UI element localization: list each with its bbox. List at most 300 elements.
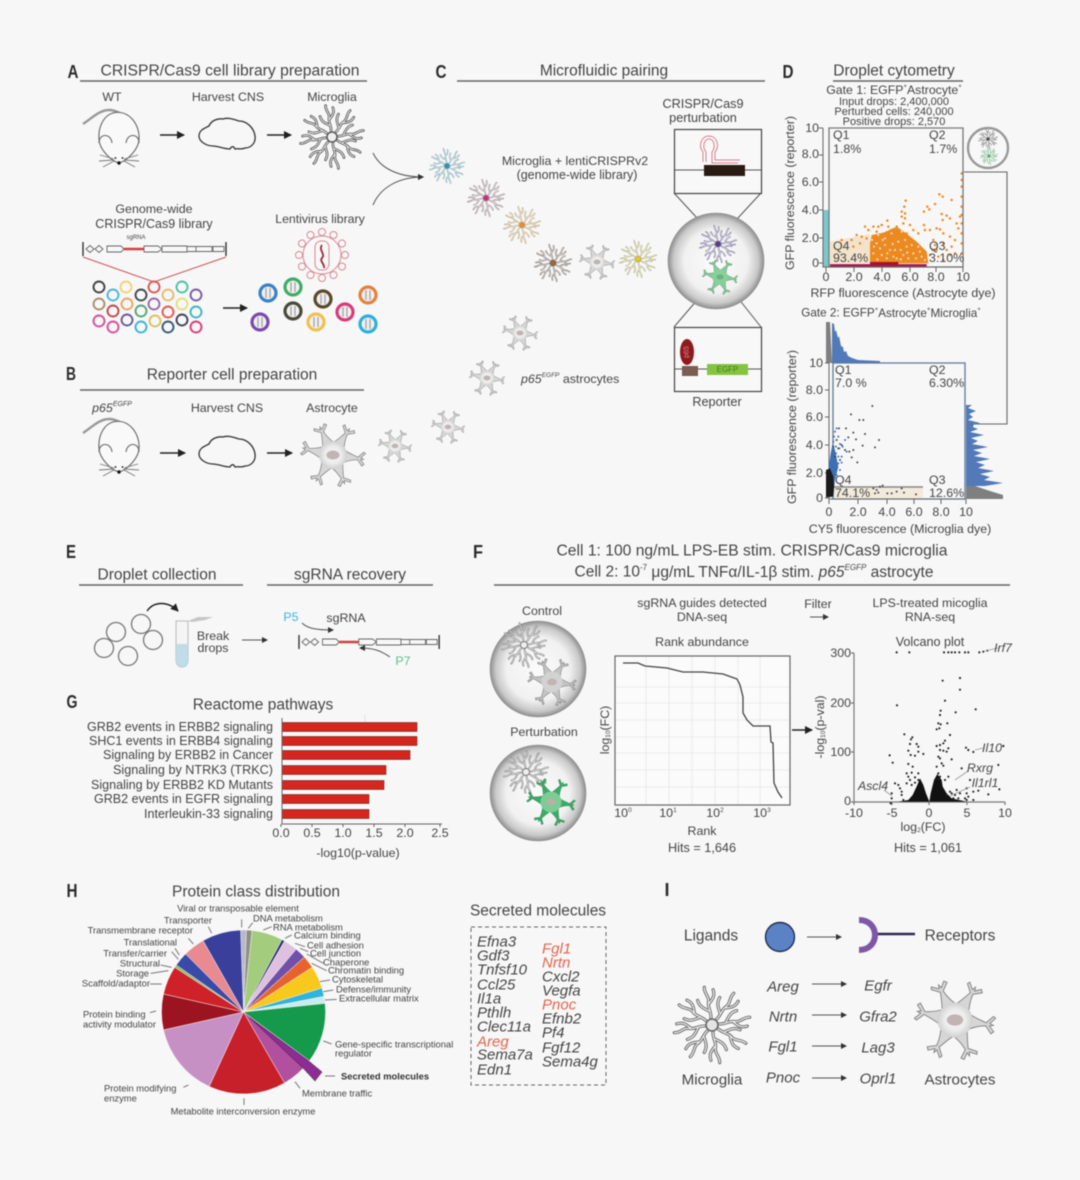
x axis title: (FC) [921, 820, 945, 834]
gene list column 1 [476, 934, 533, 1078]
x axis ticks [272, 826, 449, 840]
heading B: Reporter cell preparation [147, 366, 317, 384]
pathway labels: Signaling by ERBB2 KD Mutants [91, 778, 273, 792]
quadrant labels gate 2: Q3 [929, 473, 946, 487]
label drops: drops [198, 641, 228, 655]
x axis ticks gate 2: 6.0 [905, 505, 923, 519]
panel letter F: F [473, 542, 483, 562]
label Ligands: Ligands [684, 928, 738, 944]
label Perturbation: Perturbation [510, 725, 578, 739]
panel letter H: H [66, 881, 78, 901]
x axis ticks gate 1: 2.0 [845, 270, 863, 284]
icon: microglia [300, 105, 364, 169]
x axis ticks: 10 [753, 806, 767, 820]
pie labels: Structural [120, 958, 160, 968]
connector from gate 1 to gate 2 [964, 172, 1007, 424]
label gate 2: Microglia [930, 306, 978, 320]
pie labels: Translational [124, 936, 177, 948]
ligand gene names: Nrtn [769, 1008, 797, 1026]
heading C: Microfluidic pairing [540, 62, 668, 80]
heading secreted molecules: Secreted molecules [470, 902, 606, 920]
label sgRNA guides detected: sgRNA guides detected [637, 596, 767, 610]
pathway labels: Signaling by NTRK3 (TRKC) [113, 763, 273, 777]
x axis ticks: 10 [998, 806, 1012, 820]
vector map [83, 242, 226, 256]
pie labels: Membrane traffic [302, 1088, 372, 1098]
icon: astrocyte [300, 423, 366, 488]
gene list column 1: Ccl25 [477, 976, 516, 994]
pie labels: Transporter [164, 914, 212, 926]
receptor gene names: Oprl1 [860, 1070, 896, 1088]
chart title: Rank abundance [655, 635, 749, 649]
panel A: CRISPR/Cas9 cell library preparation [68, 62, 423, 332]
label Harvest CNS: Harvest CNS [191, 401, 263, 415]
receptor gene names: Egfr [864, 978, 893, 994]
gene list column 2: Fgf12 [542, 1040, 581, 1056]
y axis ticks gate 1: 8.0 [802, 147, 819, 161]
x axis ticks: -5 [886, 806, 898, 820]
gate 1 statistics [834, 96, 954, 128]
x axis ticks: 5 [964, 806, 971, 820]
gene list column 1: Pthlh [477, 1004, 511, 1022]
gene list column 2 [542, 940, 599, 1070]
heading line 2: EGFP [844, 562, 867, 572]
pie labels: Cell junction [310, 948, 361, 958]
gene list column 1: Gdf3 [477, 948, 510, 964]
label CRISPR/Cas9: CRISPR/Cas9 [662, 97, 744, 111]
label LPS-treated microglia: LPS-treated micoglia [872, 596, 988, 610]
icon: brain [199, 118, 255, 149]
gene list column 2: Fgl1 [542, 940, 571, 958]
gene list column 2: Nrtn [542, 954, 570, 972]
x axis ticks [614, 806, 771, 820]
rank abundance chart [598, 635, 790, 838]
pie labels: Scaffold/adaptor [82, 978, 150, 988]
gene label Il10: Il10 [982, 741, 1002, 755]
x axis title gate 2: CY5 fluorescence (Microglia dye) [809, 522, 991, 536]
y axis title: log [598, 738, 612, 754]
y axis ticks gate 1: 4.0 [802, 203, 819, 217]
pie labels: Chaperone [323, 956, 369, 968]
exploded slice secreted molecules [250, 1018, 322, 1081]
gene list column 2: Pf4 [542, 1024, 565, 1042]
x axis ticks gate 2: 10 [959, 505, 973, 519]
quadrant labels gate 1: 93.4% [833, 251, 868, 265]
label gate 1: Astrocyte [907, 83, 958, 97]
y axis ticks gate 2: 2.0 [806, 466, 823, 480]
box: CRISPR perturbation [674, 130, 762, 194]
icon: droplet with cells [968, 128, 1008, 168]
icon: WT mouse [83, 110, 139, 167]
scatter plot gate 1 [783, 116, 996, 300]
y axis title: (p-val) [813, 695, 827, 731]
gene list column 2: Sema4g [542, 1054, 599, 1070]
x axis ticks: 2 [720, 806, 724, 814]
panel letter A: A [68, 62, 78, 82]
y axis ticks: 100 [830, 745, 851, 759]
y axis ticks gate 1: 0 [812, 256, 819, 270]
primer P7 arrow [360, 648, 390, 657]
label gate 2: Astrocyte [878, 306, 927, 320]
heading D: Droplet cytometry [833, 62, 955, 80]
arrow Areg to Egfr [812, 983, 846, 985]
x axis ticks: 1.0 [334, 826, 352, 840]
gene list column 1: Sema7a [477, 1046, 533, 1064]
gene label Ascl4: Ascl4 [857, 779, 888, 793]
label Microglia: Microglia [682, 1072, 743, 1088]
y axis ticks gate 1: 2.0 [802, 231, 819, 245]
merging arrow upper to panel C [373, 153, 423, 177]
curved arrow to tube [147, 604, 178, 611]
y axis title gate 1: GFP fluorescence (reporter) [783, 116, 797, 270]
droplet with paired cells [668, 213, 764, 309]
panel G: Reactome pathways bar chart [66, 692, 449, 860]
pie labels: Protein modifying [104, 1082, 176, 1094]
ligand gene names: Pnoc [766, 1070, 801, 1086]
pathway labels: SHC1 events in ERBB4 signaling [89, 734, 273, 748]
scatter plot gate 2 [785, 350, 991, 536]
gene list column 2: Efnb2 [542, 1010, 582, 1028]
label p65 EGFP astrocytes: EGFP [542, 372, 560, 378]
quadrant labels gate 1: 1.8% [833, 142, 861, 156]
gene label Il1rl1: Il1rl1 [972, 776, 998, 790]
hits rank: Hits = 1,646 [668, 841, 736, 855]
heading line 2: p65 [818, 564, 845, 580]
y axis title gate 2: GFP fluorescence (reporter) [785, 350, 799, 504]
pie labels: activity modulator [83, 1018, 156, 1030]
quadrant labels gate 1: 3.10% [929, 251, 964, 265]
gene list column 1: Efna3 [477, 934, 517, 950]
x axis ticks gate 1: 10 [956, 270, 970, 284]
label microglia library line 2: (genome-wide library) [517, 168, 637, 182]
y axis ticks gate 2: 4.0 [806, 438, 823, 452]
arrow ligand to receptor [807, 936, 841, 938]
volcano plot [813, 635, 1013, 834]
pathway labels [87, 720, 273, 821]
heading line 2: -7 [640, 562, 648, 572]
gene list column 1: Il1a [477, 990, 501, 1008]
x axis ticks gate 1: 0 [823, 270, 830, 284]
gene label Irf7: Irf7 [994, 641, 1013, 655]
label DNA-seq: DNA-seq [677, 610, 727, 624]
panel B: Reporter cell preparation [66, 364, 465, 488]
label microglia library line 1: Microglia + lentiCRISPRv2 [502, 154, 648, 168]
y axis ticks gate 2: 10 [809, 356, 823, 370]
right histogram gate 2 [966, 405, 1003, 499]
gate 1 statistics: Positive drops: 2,570 [843, 116, 945, 128]
x axis ticks gate 1: 6.0 [901, 270, 919, 284]
arrow to vector [242, 639, 267, 641]
pie labels: Defense/immunity [336, 984, 411, 994]
label gate 1: + [958, 84, 962, 90]
receptor gene names: Lag3 [861, 1040, 895, 1056]
primer P5 arrow [302, 623, 333, 630]
pie labels: Cytoskeletal [332, 974, 383, 984]
label p65 EGFP astrocytes: astrocytes [559, 372, 619, 386]
icon: receptor [859, 920, 915, 950]
microglia color-coded library [429, 148, 657, 282]
heading droplet collection: Droplet collection [98, 566, 216, 584]
pie labels: Extracellular matrix [339, 992, 419, 1004]
icon: reporter mouse [83, 419, 139, 476]
quadrant labels gate 1: 1.7% [929, 142, 957, 156]
pie labels: Metabolite interconversion enzyme [171, 1106, 315, 1116]
panel letter B: B [66, 364, 76, 384]
pie labels: enzyme [104, 1092, 137, 1104]
icon: astrocytes [469, 315, 538, 396]
x axis ticks: 2.5 [431, 826, 449, 840]
plasmid circle library [94, 282, 202, 332]
pie labels: Viral or transposable element [177, 902, 299, 914]
x axis ticks: 1 [673, 806, 677, 814]
label perturbation: perturbation [669, 111, 737, 125]
x axis ticks gate 1: 8.0 [927, 270, 945, 284]
panel: Secreted molecules list [470, 902, 606, 1085]
pie labels: Transfer/carrier [103, 948, 167, 958]
x axis ticks: 0.0 [272, 826, 290, 840]
x axis ticks gate 1 [823, 270, 970, 284]
y axis title: (FC) [598, 706, 612, 730]
label gate 2: + [875, 307, 879, 313]
x axis ticks: 10 [706, 806, 720, 820]
label Reporter: Reporter [692, 395, 742, 409]
gene list column 1: Tnfsf10 [477, 962, 528, 978]
pie labels: Secreted molecules [341, 1070, 429, 1082]
y axis title: -log [813, 738, 827, 759]
x axis ticks [845, 806, 1012, 820]
quadrant labels gate 2 [835, 363, 964, 500]
icon: collection tube [176, 617, 213, 667]
quadrant labels gate 2: Q1 [835, 363, 852, 377]
quadrant labels gate 1: Q2 [929, 128, 946, 142]
x axis ticks gate 2: 2.0 [849, 505, 867, 519]
quadrant labels gate 1 [833, 128, 964, 265]
droplet control [490, 621, 586, 717]
quadrant labels gate 1: Q3 [929, 239, 946, 253]
icon: microglia [673, 986, 751, 1064]
gene list column 1: Areg [476, 1034, 509, 1050]
y axis ticks gate 2: 6.0 [806, 410, 823, 424]
bars [282, 722, 417, 818]
panel letter D: D [782, 62, 794, 82]
x axis title gate 1: RFP fluorescence (Astrocyte dye) [810, 286, 996, 300]
x axis ticks gate 2: 8.0 [932, 505, 950, 519]
label CRISPR/Cas9 library: CRISPR/Cas9 library [95, 217, 213, 231]
pathway labels: Signaling by ERBB2 in Cancer [103, 748, 273, 762]
gate 1 statistics: Input drops: 2,400,000 [839, 96, 949, 108]
arrow rank to volcano [792, 729, 812, 731]
label Control: Control [522, 604, 562, 618]
transduced cells with lentivirus [252, 279, 376, 332]
gene list column 1: Clec11a [477, 1018, 531, 1036]
gate 1 statistics: Perturbed cells: 240,000 [834, 106, 954, 118]
merging arrow lower to panel C [373, 177, 423, 205]
gene list column 2: Vegfa [542, 982, 581, 1000]
panel letter I: I [664, 880, 670, 900]
vector map with sgRNA [299, 635, 439, 649]
pie chart [162, 930, 326, 1094]
label Harvest CNS: Harvest CNS [192, 90, 264, 104]
panel letter G: G [66, 692, 78, 712]
y axis ticks gate 1: 10 [805, 121, 819, 135]
label gate 2: + [977, 307, 981, 313]
abundance curve [623, 663, 782, 798]
receptor gene names: Gfra2 [859, 1008, 897, 1026]
panel H: Protein class distribution [66, 881, 453, 1116]
arrow mouse to brain [160, 134, 184, 136]
y axis ticks [830, 646, 851, 808]
x axis ticks: 10 [659, 806, 673, 820]
panel F: sgRNA and RNA-seq analysis [473, 542, 1013, 855]
label Receptors: Receptors [925, 928, 996, 944]
arrow Fgl1 to Lag3 [812, 1045, 846, 1047]
label EGFP: EGFP [717, 365, 738, 374]
label genome-wide library: Genome-wide [115, 202, 193, 216]
y axis title: 10 [604, 730, 612, 738]
y axis ticks: 300 [830, 646, 851, 660]
pie leader lines [150, 919, 337, 1105]
pie labels: Calcium binding [294, 930, 361, 940]
quadrant labels gate 2: 74.1% [835, 486, 870, 500]
x axis ticks gate 1: 4.0 [873, 270, 891, 284]
scatter points gate 2 [826, 406, 916, 497]
heading line 2: astrocyte [866, 564, 933, 580]
arrow brain to microglia [267, 134, 291, 136]
panel C: Microfluidic pairing [429, 62, 765, 409]
droplet perturbation [490, 745, 586, 841]
y axis ticks: 0 [844, 794, 851, 808]
pie labels: Chromatin binding [328, 964, 404, 976]
arrow Pnoc to Oprl1 [812, 1077, 846, 1079]
pie labels: DNA metabolism [253, 912, 323, 924]
x axis ticks: 1.5 [365, 826, 383, 840]
x axis ticks: 0 [628, 806, 632, 814]
y axis ticks gate 2: 0 [816, 491, 823, 505]
y axis ticks gate 2: 8.0 [806, 383, 823, 397]
x axis ticks: 3 [767, 806, 771, 814]
quadrant labels gate 2: Q2 [929, 363, 946, 377]
ligand gene names: Areg [766, 978, 799, 996]
heading line 2: Cell 2: 10 [575, 564, 640, 580]
ligand gene names [766, 978, 801, 1086]
label gate 2: Gate 2: EGFP [801, 306, 875, 320]
zoom lines from vector to circles [83, 257, 226, 282]
label gate 2: + [927, 307, 931, 313]
label Astrocyte: Astrocyte [306, 401, 358, 415]
hits volcano: Hits = 1,061 [894, 841, 962, 855]
receptor gene names [859, 978, 897, 1088]
pathway labels: GRB2 events in ERBB2 signaling [87, 720, 273, 734]
label p65 EGFP: EGFP [113, 400, 132, 408]
pie labels: regulator [335, 1048, 372, 1058]
pie labels: Gene-specific transcriptional [335, 1038, 453, 1050]
box: EGFP reporter [674, 328, 762, 392]
pathway labels: Interleukin-33 signaling [144, 807, 273, 821]
icon: astrocyte [914, 980, 996, 1061]
label gate 1: + [903, 84, 907, 90]
heading H: Protein class distribution [172, 884, 340, 900]
label lines [884, 648, 998, 796]
label Astrocytes: Astrocytes [925, 1072, 996, 1088]
panel E: Droplet collection and sgRNA recovery [66, 542, 439, 668]
label gate 1: Gate 1: EGFP [826, 83, 903, 97]
pie labels: Transmembrane receptor [88, 924, 193, 936]
x axis ticks: 10 [614, 806, 628, 820]
top histogram gate 2 [826, 322, 880, 363]
label p65 EGFP: p65 [92, 401, 113, 415]
x axis ticks: 2.0 [396, 826, 414, 840]
zoom lines from boxes to droplet [674, 193, 761, 327]
x axis title: 2 [917, 826, 921, 834]
label p65 EGFP astrocytes: p65 [520, 372, 542, 386]
y axis ticks gate 1 [802, 121, 819, 270]
x axis ticks gate 2 [826, 505, 973, 519]
arrow brain to astrocyte [267, 452, 292, 454]
small label sgRNA: sgRNA [126, 235, 146, 241]
label sgRNA: sgRNA [326, 611, 366, 625]
label Filter: Filter [804, 597, 832, 611]
quadrant labels gate 2: 7.0 % [835, 376, 867, 390]
volcano points [890, 651, 1003, 803]
quadrant labels gate 2: 6.30% [929, 376, 964, 390]
label Microglia: Microglia [307, 90, 357, 104]
label P5: P5 [283, 610, 299, 624]
panel letter E: E [66, 542, 76, 562]
heading sgRNA recovery: sgRNA recovery [294, 566, 406, 584]
gene list column 2: Cxcl2 [542, 968, 580, 986]
gene label Rxrg: Rxrg [967, 761, 993, 775]
y axis title: 10 [820, 730, 826, 738]
gene list column 2: Pnoc [542, 996, 577, 1014]
icon: brain [199, 436, 255, 467]
pie labels [82, 902, 453, 1116]
pie labels: Cell adhesion [307, 940, 364, 950]
label RNA-seq: RNA-seq [905, 610, 955, 624]
panel I: Ligand receptor pairs [664, 880, 996, 1088]
x axis ticks: -10 [845, 806, 863, 820]
pathway labels: GRB2 events in EGFR signaling [94, 792, 273, 806]
panel letter C: C [436, 62, 446, 82]
label Break: Break [197, 629, 230, 643]
x axis ticks: 0 [926, 806, 933, 820]
chart title: Volcano plot [896, 635, 965, 649]
pie labels: Storage [116, 968, 149, 978]
ligand gene names: Fgl1 [768, 1038, 798, 1056]
icon: ligand [766, 922, 794, 952]
panel D: Droplet cytometry [782, 62, 1008, 536]
x axis title: log [901, 820, 917, 834]
quadrant labels gate 2: Q4 [835, 473, 852, 487]
arrow Nrtn to Gfra2 [812, 1014, 846, 1016]
arrow filter [810, 616, 828, 618]
label P7: P7 [395, 654, 411, 668]
heading line 1: Cell 1: 100 ng/mL LPS-EB stim. CRISPR/Cas9 microglia [556, 542, 948, 560]
x axis ticks gate 2: 0 [826, 505, 833, 519]
quadrant labels gate 2: 12.6% [929, 486, 964, 500]
icon: small astrocytes migrating [378, 410, 465, 463]
label lentivirus library: Lentivirus library [275, 212, 366, 226]
quadrant labels gate 1: Q1 [833, 128, 850, 142]
y axis ticks gate 1: 6.0 [802, 175, 819, 189]
arrow library to transduced cells [223, 307, 247, 309]
icon: droplets [94, 614, 162, 666]
label p65 on transcription factor: p65 [684, 346, 690, 358]
y axis ticks gate 2 [806, 356, 823, 505]
icon: lentivirus particle [296, 228, 348, 282]
heading A: CRISPR/Cas9 cell library preparation [100, 62, 360, 80]
x axis title: Rank [688, 824, 717, 838]
scatter points gate 1 [823, 173, 962, 267]
